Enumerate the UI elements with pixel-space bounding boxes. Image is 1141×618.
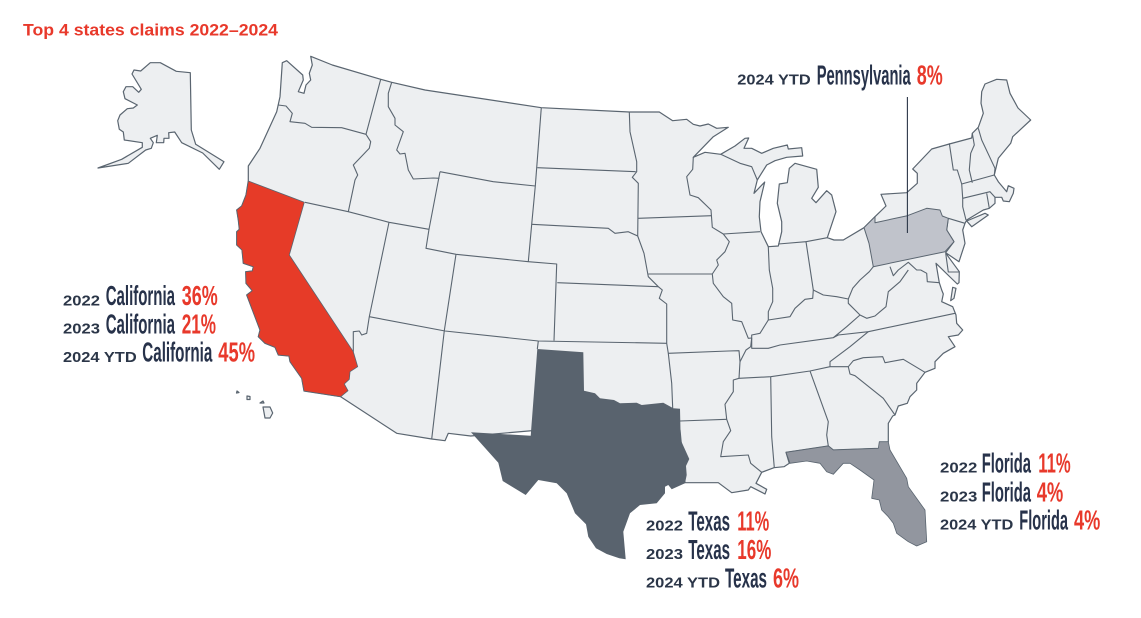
callout: California: 2024 YTD — [63, 350, 137, 366]
map: California — [237, 181, 358, 397]
callout: Florida: 2022 — [940, 460, 977, 476]
callout: Florida: 4% — [1037, 476, 1063, 507]
callout: Pennsylvania — [737, 59, 943, 90]
callout: Florida: 11% — [1038, 447, 1071, 478]
callout: Texas: Texas — [688, 506, 730, 537]
callout: Florida: 4% — [1074, 504, 1100, 535]
map: Hawaii — [236, 391, 273, 418]
callout: Texas: 2022 — [646, 519, 683, 535]
callout: California: 45% — [218, 337, 255, 368]
callout: California: 2022 — [63, 294, 100, 310]
callout: Texas: 2024 YTD — [646, 576, 720, 592]
map: Texas — [471, 349, 689, 559]
callout: Pennsylvania: 2024 YTD — [737, 72, 811, 88]
map: Florida — [786, 442, 927, 546]
callout: California: 21% — [182, 308, 216, 339]
callout: California: 2023 — [63, 322, 100, 338]
map: Pennsylvania — [864, 208, 954, 267]
callout: Texas: 16% — [737, 534, 771, 565]
callout: California: California — [106, 280, 175, 311]
map: Long Island — [967, 213, 988, 227]
callout: Texas: 6% — [773, 562, 799, 594]
callout: Texas — [646, 506, 799, 594]
callout: Texas: 2023 — [646, 547, 683, 563]
map: state borders — [278, 79, 995, 472]
title: Top 4 states claims 2022–2024 — [23, 22, 279, 40]
callout: Florida — [940, 447, 1100, 535]
callout line: Pennsylvania — [906, 97, 908, 233]
map: Virginia eastern shore — [951, 287, 956, 301]
callout: Pennsylvania: Pennsylvania — [817, 59, 911, 90]
callout: Florida: 2023 — [940, 489, 977, 505]
callout: Florida: Florida — [982, 476, 1031, 507]
callout: Florida: Florida — [1019, 504, 1068, 535]
map: contiguous states base — [237, 56, 1031, 494]
callout: California — [63, 280, 255, 368]
callout: California: California — [106, 308, 175, 339]
callout: Pennsylvania: 8% — [917, 59, 943, 90]
callout: Texas: 11% — [737, 506, 769, 537]
callout: California: California — [142, 337, 213, 368]
callout: Texas: Texas — [688, 534, 730, 565]
callout: California: 36% — [182, 280, 218, 311]
callout: Florida: Florida — [982, 447, 1031, 478]
callout: Texas: Texas — [725, 562, 767, 594]
callout: Florida: 2024 YTD — [940, 517, 1013, 533]
map: Alaska — [98, 63, 224, 169]
map of the United States — [98, 56, 1031, 559]
